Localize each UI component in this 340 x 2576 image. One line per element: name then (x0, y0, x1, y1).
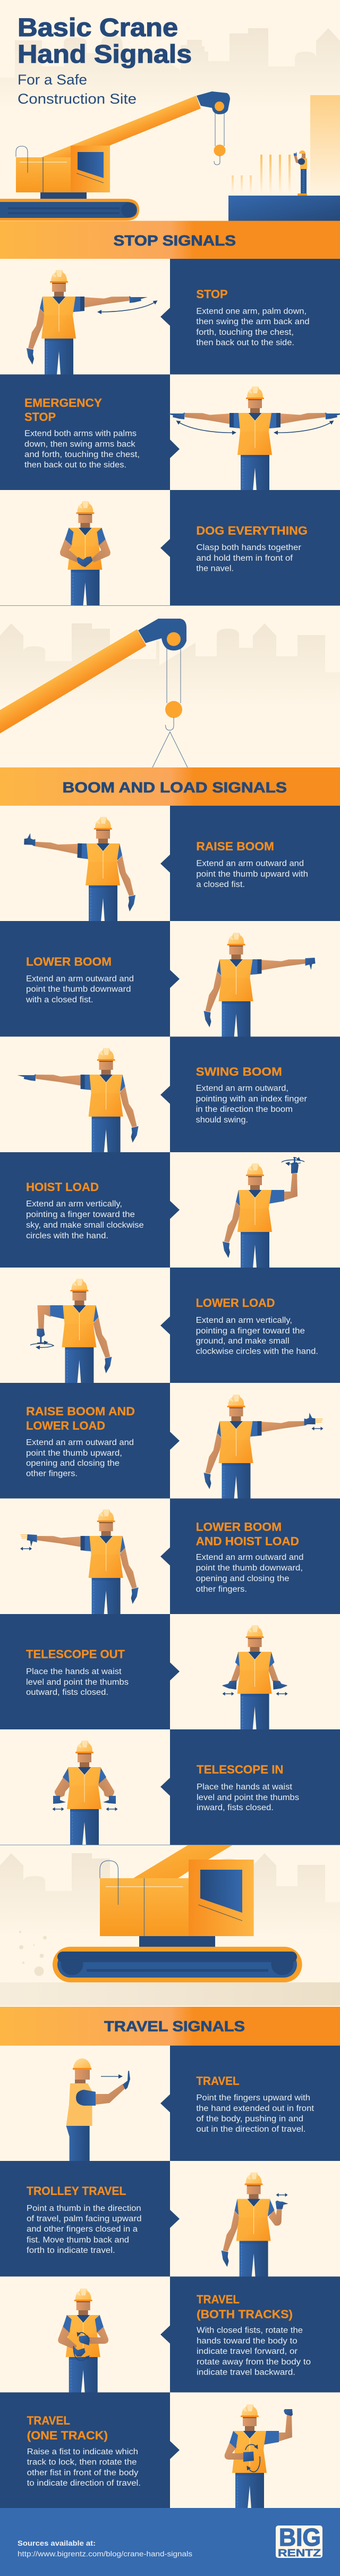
description: trolley travel: Point a thumb in the direction (27, 2204, 141, 2213)
heading: travel both tracks: (BOTH TRACKS) (197, 2308, 293, 2321)
description: telescope out (26, 1667, 129, 1697)
description: travel both tracks: indicate travel forward, or (197, 2347, 298, 2356)
panel: travel one track (0, 2393, 293, 2509)
scaffold bars (232, 155, 291, 194)
heading: travel both tracks: TRAVEL (197, 2293, 240, 2306)
description: hoist load: pointing a finger toward the (26, 1210, 135, 1219)
heading: travel one track (27, 2414, 108, 2442)
description: stop: then back out to the side. (196, 338, 294, 348)
description: swing boom: Extend an arm outward, (196, 1084, 288, 1093)
heading: travel one track: (ONE TRACK) (27, 2429, 108, 2442)
description: hoist load: Extend an arm vertically, (26, 1200, 122, 1209)
sources: http://www.bigrentz.com/blog/crane-hand-signals (18, 2549, 192, 2558)
footer (0, 2508, 340, 2576)
heading: lower boom: LOWER BOOM (26, 955, 112, 968)
description: telescope in (197, 1783, 299, 1812)
sources: Sources available at: (18, 2539, 96, 2547)
description: travel (196, 2093, 314, 2134)
heading: emergency stop: STOP (24, 410, 56, 424)
description: lower boom (26, 974, 134, 1004)
description: travel one track (27, 2447, 141, 2488)
figure: trolley travel worker (222, 2173, 288, 2277)
description: swing boom (196, 1084, 307, 1125)
heading: emergency stop: EMERGENCY (24, 396, 102, 410)
section banner: stop signals (0, 221, 340, 259)
heading: raise boom and lower load (26, 1405, 135, 1432)
description: stop (196, 307, 309, 348)
description: travel one track: to indicate direction of travel. (27, 2479, 141, 2488)
description: lower boom and hoist load (196, 1553, 303, 1594)
heading: travel: TRAVEL (196, 2074, 240, 2088)
description: lower boom and hoist load: point the thumb downward, (196, 1564, 303, 1573)
description: dog everything: Clasp both hands together (196, 543, 301, 552)
figure: emergency stop worker (166, 386, 340, 491)
divider scene: boom and hook (0, 619, 340, 767)
panel: travel (66, 2046, 340, 2161)
description: lower boom and hoist load: Extend an arm outward and (196, 1553, 303, 1562)
description: telescope out: level and point the thumbs (26, 1678, 129, 1687)
heading: raise boom and lower load: LOWER LOAD (26, 1419, 105, 1432)
background building (310, 95, 340, 196)
description: raise boom: Extend an arm outward and (196, 859, 304, 868)
description: travel: the hand extended out in front (196, 2104, 314, 2113)
subtitle: For a Safe (18, 72, 87, 88)
figure: stop worker (27, 270, 156, 375)
section banner: boom and load signals: BOOM AND LOAD SIGNALS (63, 779, 287, 796)
small signalling worker (294, 150, 307, 196)
crane (0, 91, 230, 221)
description: trolley travel: and other fingers closed in a (27, 2225, 138, 2234)
description: lower boom: Extend an arm outward and (26, 974, 134, 983)
description: lower boom: with a closed fist. (26, 995, 93, 1004)
description: lower boom and hoist load: other fingers. (196, 1585, 247, 1594)
description: stop: forth, touching the chest, (196, 328, 294, 337)
description: raise boom and lower load: other fingers. (26, 1469, 78, 1479)
description: travel: Point the fingers upward with (196, 2093, 310, 2102)
crane (53, 1845, 302, 1982)
description: stop: Extend one arm, palm down, (196, 307, 307, 316)
panel: lower boom and hoist load (20, 1499, 340, 1614)
description: swing boom: should swing. (196, 1116, 248, 1125)
section banner: travel signals: TRAVEL SIGNALS (104, 2018, 245, 2034)
platform (228, 196, 340, 221)
panel: trolley travel (0, 2161, 288, 2277)
section banner: travel signals (0, 2007, 340, 2046)
description: lower load (196, 1316, 318, 1356)
heading: swing boom: SWING BOOM (196, 1065, 282, 1078)
heading: telescope out: TELESCOPE OUT (26, 1648, 125, 1661)
panel: travel both tracks (58, 2277, 340, 2393)
description: lower load: clockwise circles with the hand. (196, 1347, 318, 1356)
dust clouds (19, 1931, 47, 1976)
description: raise boom (196, 859, 308, 889)
panel: lower boom (0, 921, 316, 1037)
figure: telescope in worker (52, 1741, 118, 1845)
description: travel both tracks (197, 2326, 311, 2377)
heading: emergency stop (24, 396, 102, 424)
heading: raise boom: RAISE BOOM (196, 840, 274, 853)
title (18, 14, 192, 69)
heading: lower boom and hoist load: LOWER BOOM (196, 1521, 282, 1534)
panel: lower load (30, 1268, 340, 1383)
description: lower load: ground, and make small (196, 1337, 289, 1346)
figure: raise boom and lower load worker (204, 1395, 323, 1499)
description: stop: then swing the arm back and (196, 317, 309, 326)
description: lower load: pointing a finger toward the (196, 1327, 305, 1336)
skyline (0, 1853, 340, 1937)
heading: lower boom and hoist load (196, 1521, 299, 1548)
panel: hoist load (0, 1152, 304, 1268)
heading: telescope in: TELESCOPE IN (197, 1763, 284, 1776)
logo: BigRentz: RENTZ (278, 2547, 321, 2559)
description: emergency stop: then back out to the sides. (24, 460, 126, 470)
panel: emergency stop (0, 374, 340, 491)
description: emergency stop (24, 429, 140, 470)
description: hoist load (26, 1200, 144, 1240)
ground (0, 1982, 340, 2006)
description: swing boom: pointing with an index finger (196, 1095, 307, 1103)
heading: lower load: LOWER LOAD (196, 1296, 275, 1310)
section banner: stop signals: STOP SIGNALS (114, 232, 236, 249)
figure: travel both tracks worker (58, 2288, 108, 2393)
description: trolley travel: fist. Move thumb back and (27, 2235, 129, 2244)
description: travel one track: track to lock, then rotate the (27, 2458, 137, 2467)
sources (18, 2539, 192, 2558)
description: travel one track: Raise a fist to indicate which (27, 2447, 138, 2456)
description: dog everything: the navel. (196, 564, 234, 573)
description: telescope out: outward, fists closed. (26, 1688, 108, 1697)
description: lower boom: point the thumb downward (26, 985, 131, 994)
divider line (0, 605, 340, 606)
description: dog everything: and hold them in front of (196, 554, 293, 563)
description: raise boom: point the thumb upward with (196, 869, 308, 879)
description: travel both tracks: indicate travel backward. (197, 2368, 295, 2377)
panel: stop (27, 259, 340, 375)
description: travel: out in the direction of travel. (196, 2125, 306, 2134)
figure: lower load worker (30, 1279, 112, 1383)
description: swing boom: in the direction the boom (196, 1105, 293, 1114)
description: dog everything (196, 543, 301, 573)
subtitle (18, 72, 137, 107)
divider scene: crane on tracks (0, 1845, 340, 2006)
section banner: boom and load signals (0, 767, 340, 806)
figure: telescope out worker (223, 1625, 288, 1730)
description: lower boom and hoist load: opening and closing the (196, 1574, 289, 1583)
description: raise boom and lower load: point the thumb upward, (26, 1449, 122, 1458)
figure: hoist load worker (223, 1157, 304, 1268)
title: Hand Signals (18, 40, 192, 69)
description: emergency stop: down, then swing arms back (24, 440, 135, 449)
panel: dog everything (60, 490, 340, 606)
figure: dog everything worker (60, 501, 110, 606)
description: emergency stop: Extend both arms with palms (24, 429, 137, 438)
description: travel both tracks: With closed fists, rotate the (197, 2326, 303, 2335)
rotation arrows (282, 1158, 304, 1164)
figure: lower boom and hoist load worker (20, 1509, 139, 1614)
skyline (0, 623, 340, 707)
description: trolley travel (27, 2204, 141, 2255)
heading: raise boom and lower load: RAISE BOOM AND (26, 1405, 135, 1418)
heading: lower boom and hoist load: AND HOIST LOAD (196, 1535, 299, 1548)
title: Basic Crane (18, 14, 178, 42)
figure: lower boom worker (204, 933, 316, 1037)
figure: travel worker (66, 2058, 130, 2161)
crane boom and hook (0, 619, 188, 767)
logo: BigRentz: BIG (279, 2523, 321, 2551)
description: travel one track: other fist in front of the body (27, 2468, 139, 2477)
heading: trolley travel: TROLLEY TRAVEL (27, 2184, 126, 2198)
heading: travel both tracks (197, 2293, 293, 2321)
heading: dog everything: DOG EVERYTHING (196, 524, 308, 537)
description: telescope out: Place the hands at waist (26, 1667, 122, 1676)
description: trolley travel: forth to indicate travel. (27, 2246, 115, 2255)
subtitle: Construction Site (18, 91, 137, 107)
description: travel both tracks: rotate away from the body to (197, 2358, 311, 2367)
figure: swing boom worker (18, 1048, 139, 1153)
description: raise boom and lower load: opening and closing the (26, 1459, 120, 1468)
panel: telescope out (0, 1614, 288, 1730)
header scene (0, 14, 340, 221)
description: telescope in: level and point the thumbs (197, 1793, 299, 1802)
heading: travel one track: TRAVEL (27, 2414, 70, 2427)
description: travel: of the body, pushing in and (196, 2114, 303, 2124)
description: hoist load: sky, and make small clockwise (26, 1221, 144, 1230)
panel: swing boom (18, 1036, 340, 1153)
description: lower load: Extend an arm vertically, (196, 1316, 292, 1325)
skyline (0, 28, 340, 109)
description: raise boom and lower load (26, 1438, 134, 1479)
description: raise boom and lower load: Extend an arm outward and (26, 1438, 134, 1447)
rotation arrows (30, 1342, 54, 1348)
description: hoist load: circles with the hand. (26, 1231, 108, 1240)
panel: raise boom (23, 806, 340, 922)
panel: telescope in (52, 1729, 340, 1845)
figure: raise boom worker (23, 817, 135, 922)
description: telescope in: inward, fists closed. (197, 1803, 274, 1812)
figure: travel one track worker (225, 2404, 293, 2509)
heading: hoist load: HOIST LOAD (26, 1180, 99, 1194)
description: emergency stop: and forth, touching the chest, (24, 450, 140, 459)
description: raise boom: a closed fist. (196, 880, 245, 889)
heading: stop: STOP (196, 288, 228, 301)
description: telescope in: Place the hands at waist (197, 1783, 293, 1792)
description: travel both tracks: hands toward the body to (197, 2336, 298, 2346)
description: trolley travel: of travel, palm facing upward (27, 2214, 141, 2224)
panel: raise boom and lower load (0, 1383, 323, 1499)
